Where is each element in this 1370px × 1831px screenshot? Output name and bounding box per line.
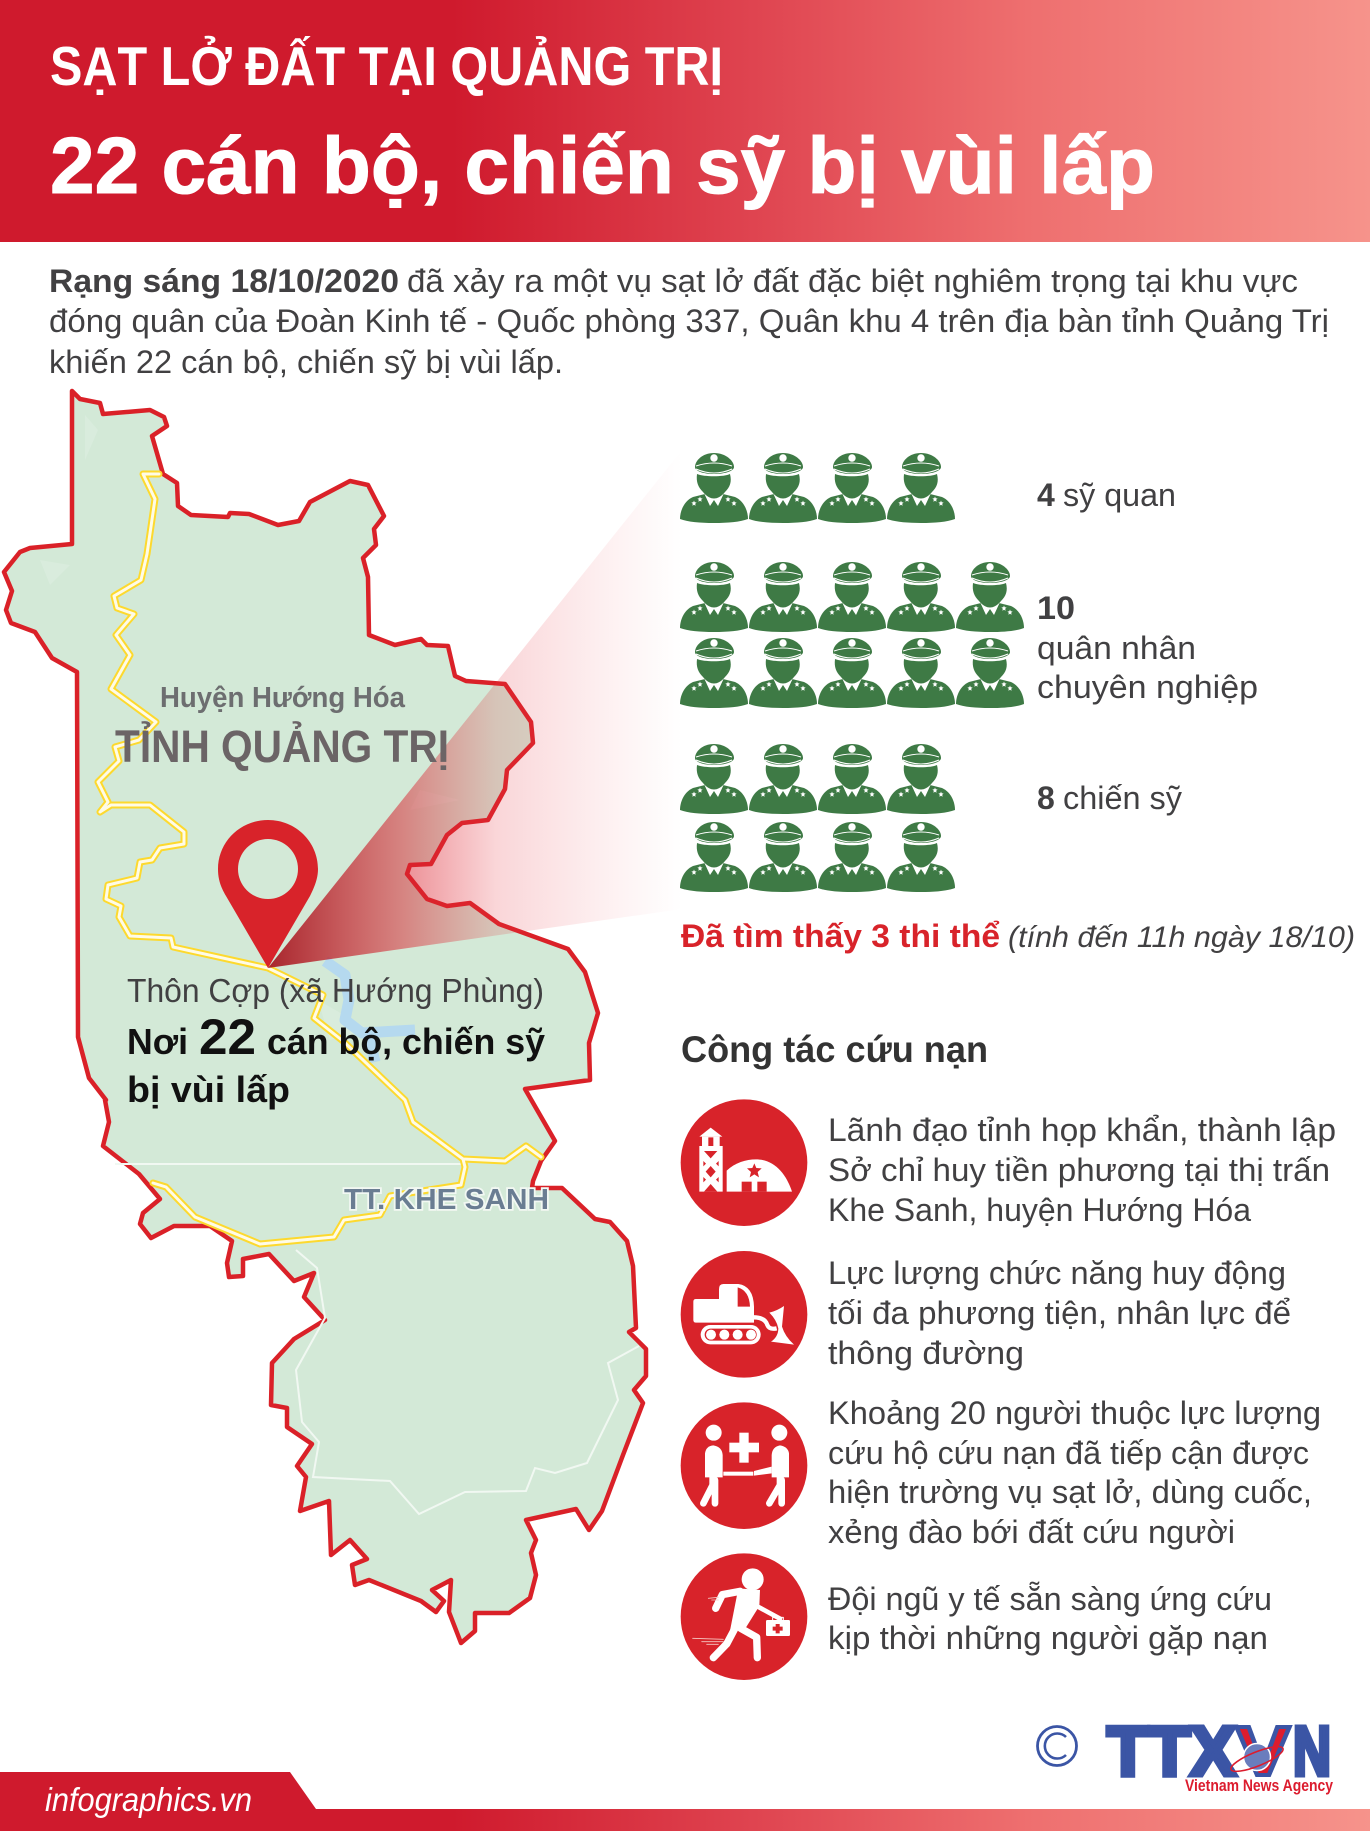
label: 4 officers: sỹ quan — [1063, 477, 1176, 513]
place note — [127, 1009, 545, 1110]
bodies found note: Đã tìm thấy 3 thi thể — [681, 918, 1000, 954]
province name: TỈNH QUẢNG TRỊ — [115, 721, 449, 772]
place note: bị vùi lấp — [127, 1069, 290, 1110]
icon: command post — [681, 1099, 807, 1226]
place note: 22 — [199, 1009, 256, 1065]
province shape — [4, 391, 646, 1643]
intro paragraph — [49, 263, 1329, 380]
location pin — [218, 820, 318, 968]
lake — [325, 961, 415, 1062]
text: rescue team — [828, 1395, 1321, 1550]
text: command post: Khe Sanh, huyện Hướng Hóa — [828, 1192, 1251, 1228]
text: mobilisation: thông đường — [828, 1335, 1024, 1371]
intro paragraph: đóng quân của Đoàn Kinh tế - Quốc phòng 337, Quân khu 4 trên địa bàn tỉnh Quảng Trị — [49, 303, 1329, 339]
logo: TTXVN: N — [1293, 1712, 1331, 1790]
footer website: infographics.vn — [45, 1781, 252, 1818]
text: rescue team: hiện trường vụ sạt lở, dùng cuốc, — [828, 1474, 1312, 1510]
title line 1: SẠT LỞ ĐẤT TẠI QUẢNG TRỊ — [50, 35, 723, 97]
icon: stretcher bearers — [681, 1402, 807, 1529]
map labels — [115, 682, 545, 1110]
district borders — [115, 1164, 639, 1514]
intro paragraph: Rạng sáng 18/10/2020 — [49, 263, 399, 299]
title line 2: 22 cán bộ, chiến sỹ bị vùi lấp — [50, 121, 1155, 210]
text: rescue team: cứu hộ cứu nạn đã tiếp cận được — [828, 1435, 1309, 1471]
label: 4 officers: 4 — [1037, 477, 1055, 513]
place note: Nơi — [127, 1021, 188, 1062]
text: command post: Sở chỉ huy tiền phương tại thị trấn — [828, 1152, 1330, 1188]
text: rescue team: Khoảng 20 người thuộc lực lượng — [828, 1395, 1321, 1431]
village name: Thôn Cợp (xã Hướng Phùng) — [127, 972, 544, 1009]
text: mobilisation: tối đa phương tiện, nhân lực để — [828, 1295, 1291, 1331]
logo: TTXVN — [1107, 1712, 1333, 1795]
header banner — [0, 0, 1370, 242]
icon: bulldozer — [681, 1251, 807, 1378]
text: mobilisation — [828, 1255, 1291, 1371]
town label: TT. KHE SANH — [344, 1184, 549, 1216]
text: medical team: kịp thời những người gặp nạn — [828, 1620, 1268, 1656]
place note: cán bộ, chiến sỹ — [267, 1021, 545, 1062]
text: medical team: Đội ngũ y tế sẵn sàng ứng cứu — [828, 1581, 1272, 1617]
label: 8 soldiers: chiến sỹ — [1063, 780, 1182, 816]
road — [98, 474, 541, 1244]
label: 10 professional soldiers: chuyên nghiệp — [1037, 669, 1258, 705]
logo: TTXVN: V — [1236, 1712, 1290, 1790]
terrain shading — [40, 415, 460, 1040]
pictogram: 8 soldiers — [680, 744, 955, 892]
label: 10 professional soldiers: quân nhân — [1037, 630, 1196, 666]
intro paragraph: khiến 22 cán bộ, chiến sỹ bị vùi lấp. — [49, 344, 563, 380]
intro paragraph: đã xảy ra một vụ sạt lở đất đặc biệt nghiêm trọng tại khu vực — [407, 263, 1298, 299]
label: 10 professional soldiers: 10 — [1037, 590, 1075, 626]
pictogram: 4 officers — [680, 453, 955, 523]
pictogram: 10 professional soldiers — [680, 562, 1024, 708]
label: 8 soldiers: 8 — [1037, 780, 1055, 816]
text: command post — [828, 1112, 1336, 1228]
logo: TTXVN: Vietnam News Agency — [1185, 1776, 1333, 1795]
label: 10 professional soldiers — [1037, 590, 1258, 705]
icon: medic running — [681, 1553, 807, 1680]
callout wedge from pin to casualty panel — [268, 450, 682, 968]
map of Quang Tri — [4, 391, 646, 1643]
logo: TTXVN: TTX — [1107, 1712, 1236, 1790]
rescue heading: Công tác cứu nạn — [681, 1029, 988, 1070]
icon: copyright — [1038, 1726, 1076, 1766]
bodies found note: (tính đến 11h ngày 18/10) — [1008, 921, 1355, 954]
district name: Huyện Hướng Hóa — [160, 682, 406, 714]
text: rescue team: xẻng đào bới đất cứu người — [828, 1514, 1235, 1550]
footer band — [0, 1772, 1370, 1831]
bodies found note — [681, 918, 1355, 954]
text: command post: Lãnh đạo tỉnh họp khẩn, thành lập — [828, 1112, 1336, 1148]
text: mobilisation: Lực lượng chức năng huy động — [828, 1255, 1286, 1291]
text: medical team — [828, 1581, 1272, 1656]
